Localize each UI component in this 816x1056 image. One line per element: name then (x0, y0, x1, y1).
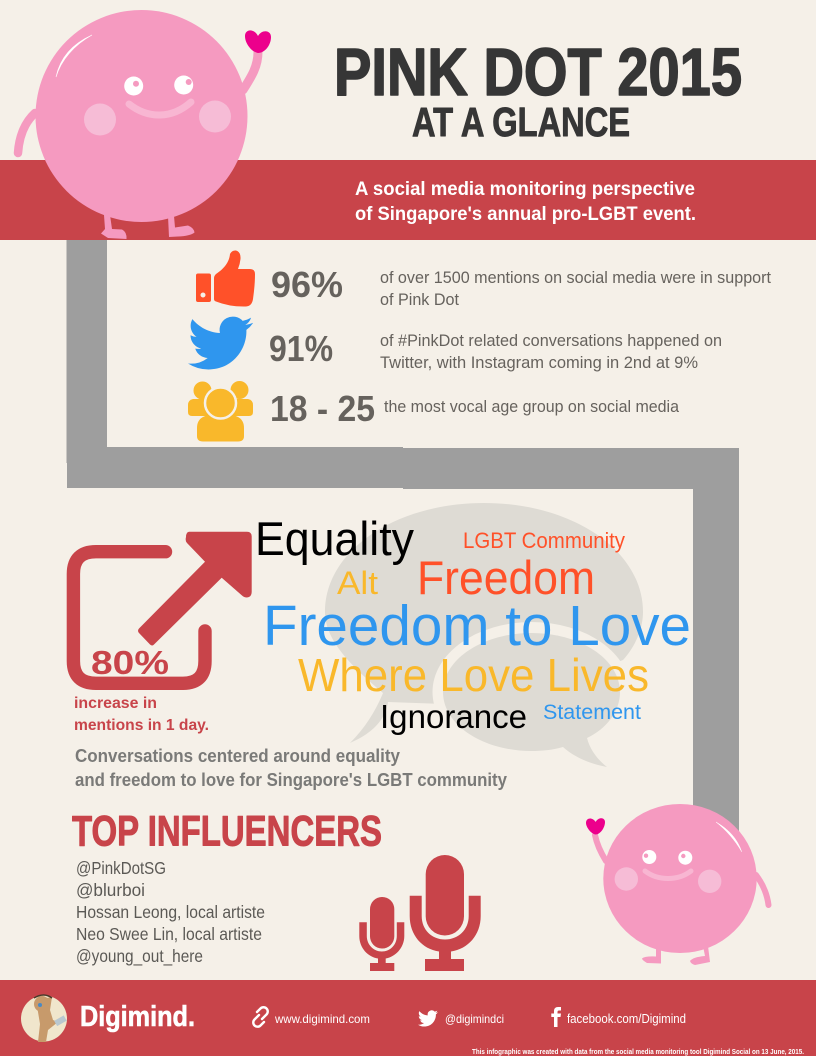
stat: 91%: 91% (269, 328, 333, 369)
heading: top influencers: TOP INFLUENCERS (72, 808, 382, 856)
text: 91% description: Twitter, with Instagram coming in 2nd at 9% (380, 353, 698, 372)
word cloud: Statement (543, 701, 641, 724)
list: influencers: @blurboi (76, 880, 145, 900)
text: increase in mentions (74, 695, 209, 734)
text: conversations summary (75, 746, 507, 790)
text: twitter handle: @digimindci (445, 1012, 504, 1026)
text: website: www.digimind.com (274, 1012, 370, 1026)
text: 91% description: of #PinkDot related conversations happened on (380, 331, 722, 350)
icon: large microphone (410, 855, 481, 971)
grey connector path (66, 240, 739, 860)
icon: small microphone (359, 897, 404, 971)
word cloud: LGBT Community (463, 528, 625, 553)
subtitle: A social media monitoring perspective (355, 178, 695, 200)
list: influencers: Hossan Leong, local artiste (76, 902, 265, 922)
title: AT A GLANCE (412, 99, 630, 145)
icon: group of people (188, 381, 253, 442)
mascot: bottom pink dot (586, 804, 768, 965)
text: 96% description (380, 268, 771, 309)
speech bubbles (325, 503, 643, 767)
subtitle: of Singapore's annual pro-LGBT event. (355, 203, 696, 225)
text: facebook page: facebook.com/Digimind (567, 1012, 686, 1026)
icon: link (253, 1007, 268, 1027)
word cloud: Freedom (417, 551, 595, 604)
mascot: top pink dot (18, 10, 271, 239)
list: influencers (76, 858, 265, 967)
title (334, 35, 742, 145)
text: 91% description (380, 331, 722, 372)
list: influencers: @young_out_here (76, 946, 203, 967)
text: increase in mentions: mentions in 1 day. (74, 717, 209, 734)
subtitle (355, 178, 696, 225)
icon: growth arrow (73, 532, 252, 683)
icon: thumbs up (196, 250, 255, 307)
text: conversations summary: Conversations centered around equality (75, 746, 400, 766)
word cloud: Ignorance (380, 698, 527, 735)
text: 96% description: of over 1500 mentions on social media were in support (380, 268, 771, 287)
title: PINK DOT 2015 (334, 35, 742, 110)
list: influencers: @PinkDotSG (76, 858, 166, 878)
logo: meerkat mascot (21, 995, 67, 1042)
icon: twitter bird (188, 317, 253, 369)
icon: twitter (418, 1010, 438, 1027)
stat: 80%: 80% (91, 644, 169, 681)
footer band (0, 980, 816, 1056)
red banner (0, 160, 816, 240)
text: 96% description: of Pink Dot (380, 290, 459, 309)
word cloud (255, 512, 691, 735)
stat: 96%: 96% (271, 264, 343, 305)
stat: age group: 18 - 25 (270, 388, 375, 429)
word cloud: Freedom to Love (263, 594, 691, 658)
text: conversations summary: and freedom to love for Singapore's LGBT community (75, 770, 507, 790)
text: increase in mentions: increase in (74, 695, 157, 712)
word cloud: Alt (337, 565, 378, 601)
list: influencers: Neo Swee Lin, local artiste (76, 924, 262, 944)
text: age group description: the most vocal age group on social media (384, 397, 680, 416)
word cloud: Where Love Lives (298, 649, 649, 701)
word cloud: Equality (255, 512, 414, 565)
icon: facebook (551, 1007, 561, 1027)
logo: Digimind wordmark: Digimind. (80, 1001, 195, 1033)
